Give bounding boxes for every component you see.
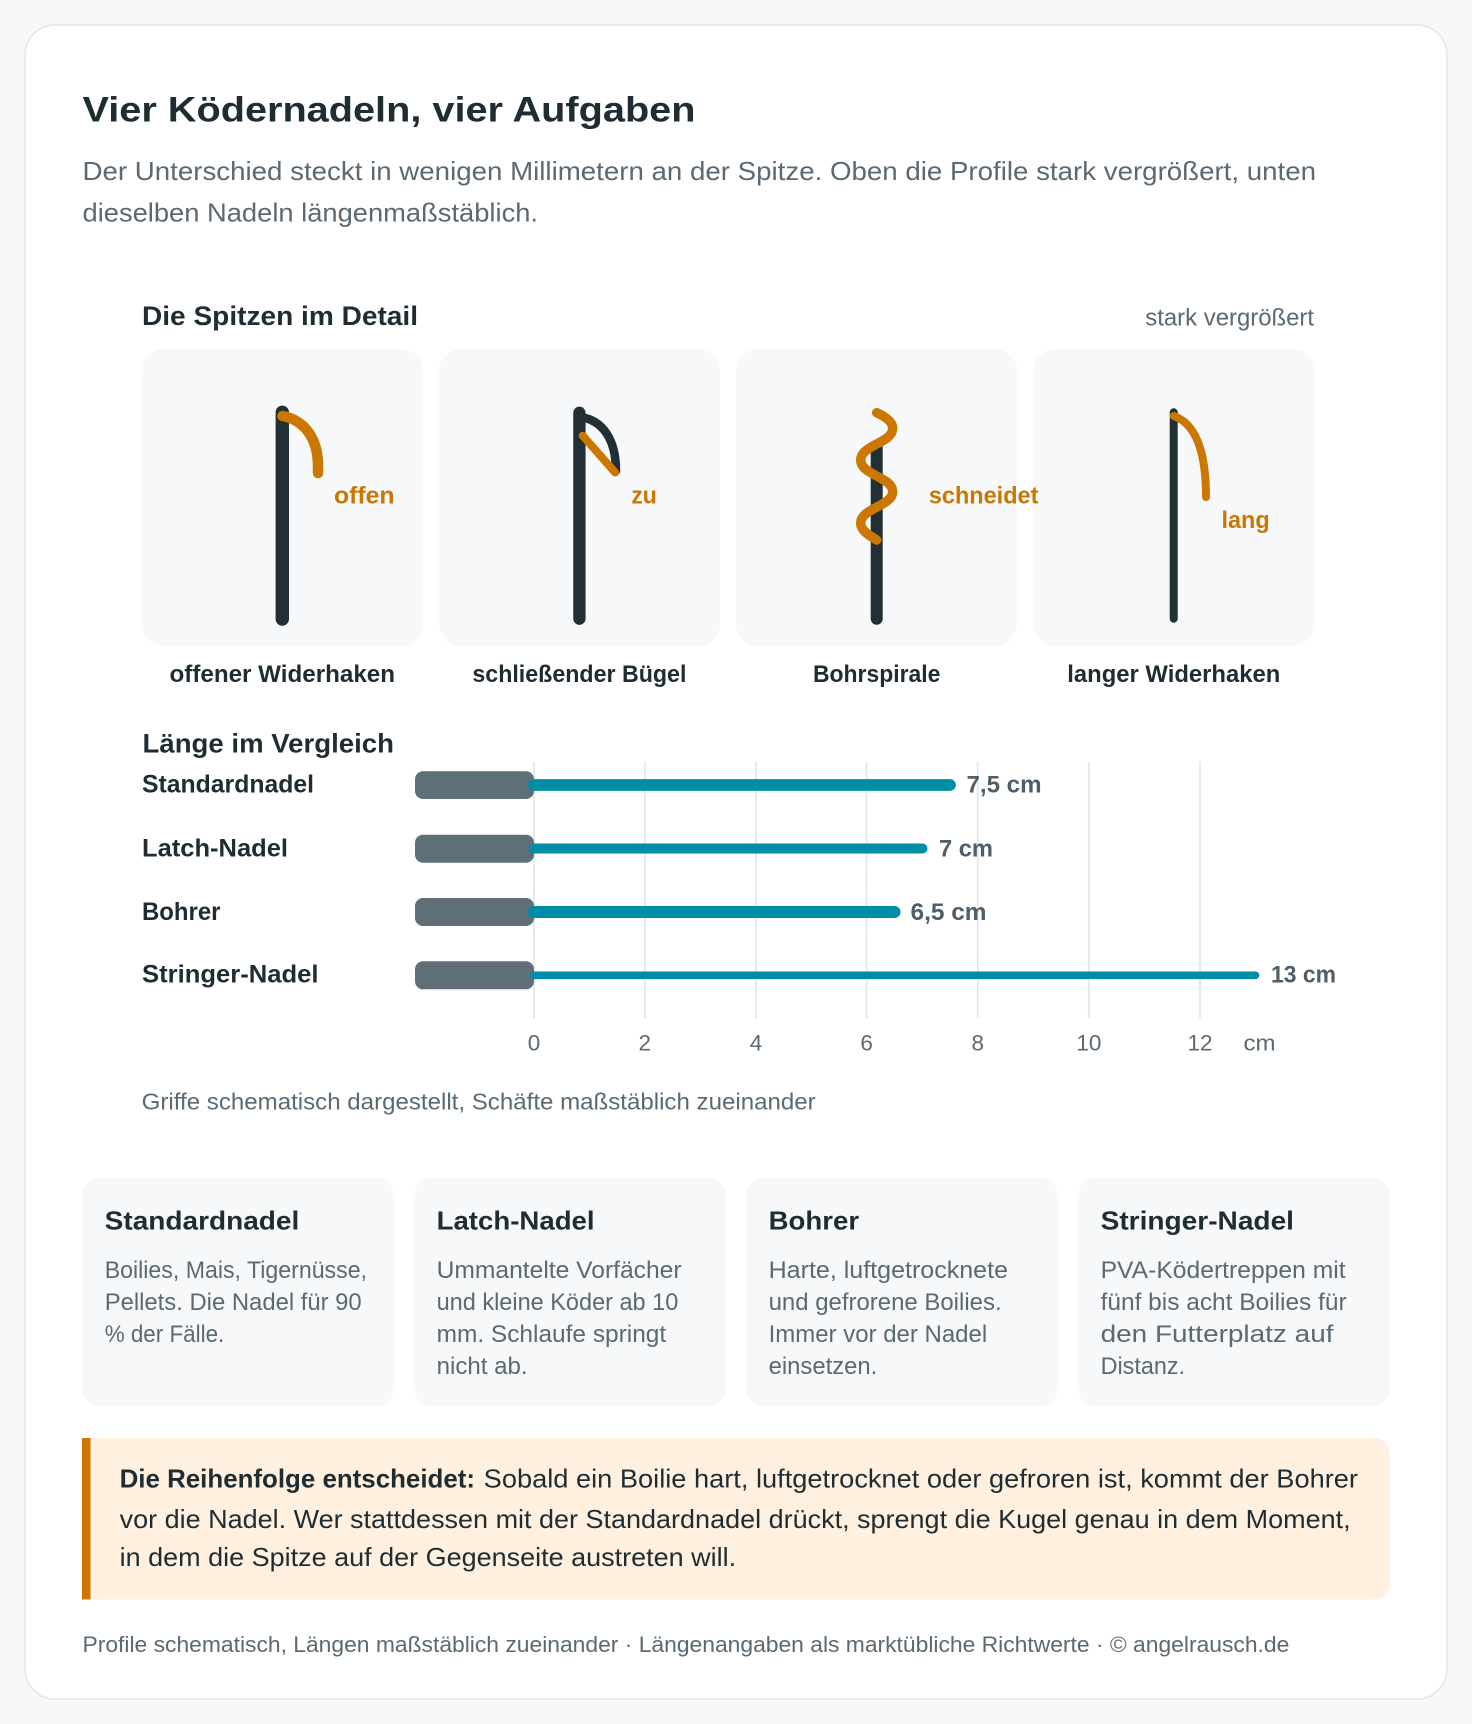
panel: open barb xyxy=(142,349,423,646)
body: Immer vor der Nadel xyxy=(769,1321,987,1348)
footer note: Profile schematisch, Längen maßstäblich zueinander · Längenangaben als marktübliche Richtwerte · © angelrausch.de xyxy=(82,1632,1289,1657)
body: nicht ab. xyxy=(437,1353,528,1380)
body: PVA-Ködertreppen mit xyxy=(1101,1257,1346,1284)
body: fünf bis acht Boilies für xyxy=(1101,1289,1347,1316)
row: Bohrer: 6,5 cm xyxy=(910,899,986,926)
axis labels: 0 xyxy=(528,1031,540,1056)
axis labels: cm xyxy=(1244,1031,1276,1056)
caption: closing latch: schließender Bügel xyxy=(472,661,686,688)
panel: Stringer-Nadel xyxy=(1078,1178,1390,1406)
panel: long barb xyxy=(1034,349,1314,646)
row: Standardnadel xyxy=(142,771,1042,799)
body: den Futterplatz auf xyxy=(1101,1321,1334,1348)
callout: order matters: Sobald ein Boilie hart, luftgetrocknet oder gefroren ist, kommt der Bohrer xyxy=(484,1464,1358,1494)
section heading: tips: Die Spitzen im Detail xyxy=(142,301,418,331)
row: Latch-Nadel: 7 cm xyxy=(939,836,993,863)
needle shaft xyxy=(871,447,883,619)
heading: Standardnadel xyxy=(105,1206,299,1236)
body: Boilies, Mais, Tigernüsse, xyxy=(105,1257,367,1284)
axis labels: 8 xyxy=(972,1031,984,1056)
axis labels: 2 xyxy=(639,1031,651,1056)
body: Pellets. Die Nadel für 90 xyxy=(105,1289,362,1316)
needle shaft and loop xyxy=(579,413,616,619)
panel: Standardnadel xyxy=(82,1178,394,1406)
row: Standardnadel: Standardnadel xyxy=(142,771,314,799)
row: Bohrer: Bohrer xyxy=(142,898,221,926)
row: Bohrer xyxy=(142,898,986,926)
body: und kleine Köder ab 10 xyxy=(437,1289,678,1316)
axis labels: 12 xyxy=(1187,1031,1213,1056)
body: % der Fälle. xyxy=(105,1321,224,1348)
label: zu: zu xyxy=(631,482,657,509)
callout: order matters: Die Reihenfolge entscheidet: xyxy=(120,1464,475,1494)
body xyxy=(105,1257,367,1348)
caption: drill spiral: Bohrspirale xyxy=(813,661,940,688)
body xyxy=(1101,1257,1347,1380)
row: Latch-Nadel: Latch-Nadel xyxy=(142,835,288,863)
label: lang: lang xyxy=(1222,507,1270,534)
heading: Bohrer xyxy=(769,1206,859,1236)
chart: needle lengths xyxy=(142,762,1336,1056)
label: offen: offen xyxy=(334,482,394,509)
needle shaft xyxy=(1170,412,1178,619)
body: Harte, luftgetrocknete xyxy=(769,1257,1008,1284)
row: Stringer-Nadel: 13 cm xyxy=(1271,962,1336,989)
panel: drill spiral xyxy=(736,349,1038,646)
row: Standardnadel: 7,5 cm xyxy=(966,772,1042,799)
caption: long barb: langer Widerhaken xyxy=(1067,661,1280,688)
row: Stringer-Nadel xyxy=(142,961,1336,989)
body: mm. Schlaufe springt xyxy=(437,1321,667,1348)
needle shaft xyxy=(276,412,289,619)
chart caption: Griffe schematisch dargestellt, Schäfte maßstäblich zueinander xyxy=(142,1088,816,1114)
section heading: length comparison: Länge im Vergleich xyxy=(142,729,394,759)
caption: open barb: offener Widerhaken xyxy=(170,661,395,688)
label: schneidet: schneidet xyxy=(929,482,1038,509)
axis labels: 10 xyxy=(1076,1031,1101,1056)
panel: Latch-Nadel xyxy=(414,1178,726,1406)
barb xyxy=(1174,416,1206,497)
row: Stringer-Nadel: Stringer-Nadel xyxy=(142,961,318,989)
subtitle xyxy=(82,156,1316,228)
barb xyxy=(282,416,318,473)
subtitle: Der Unterschied steckt in wenigen Millimetern an der Spitze. Oben die Profile stark vergrößert, unten xyxy=(82,156,1316,186)
body: und gefrorene Boilies. xyxy=(769,1289,1002,1316)
heading: Stringer-Nadel xyxy=(1101,1206,1294,1236)
body: einsetzen. xyxy=(769,1353,877,1380)
panel: Bohrer xyxy=(746,1178,1058,1406)
callout: order matters xyxy=(82,1438,1390,1600)
panel: closing latch xyxy=(439,349,720,646)
body xyxy=(437,1257,682,1380)
axis labels xyxy=(528,1031,1276,1056)
axis labels: 4 xyxy=(750,1031,762,1056)
callout: order matters: vor die Nadel. Wer stattdessen mit der Standardnadel drückt, sprengt die Kugel genau in dem Moment, xyxy=(120,1504,1351,1534)
spiral xyxy=(861,413,893,540)
subtitle: dieselben Nadeln längenmaßstäblich. xyxy=(82,198,538,228)
latch xyxy=(583,436,615,472)
heading: Latch-Nadel xyxy=(437,1206,595,1236)
note: strongly magnified: stark vergrößert xyxy=(1145,304,1314,331)
body: Ummantelte Vorfächer xyxy=(437,1257,682,1284)
callout: order matters: in dem die Spitze auf der Gegenseite austreten will. xyxy=(120,1542,736,1572)
title: Vier Ködernadeln, vier Aufgaben xyxy=(82,90,696,129)
body: Distanz. xyxy=(1101,1353,1185,1380)
body xyxy=(769,1257,1008,1380)
axis labels: 6 xyxy=(860,1031,873,1056)
row: Latch-Nadel xyxy=(142,835,993,863)
